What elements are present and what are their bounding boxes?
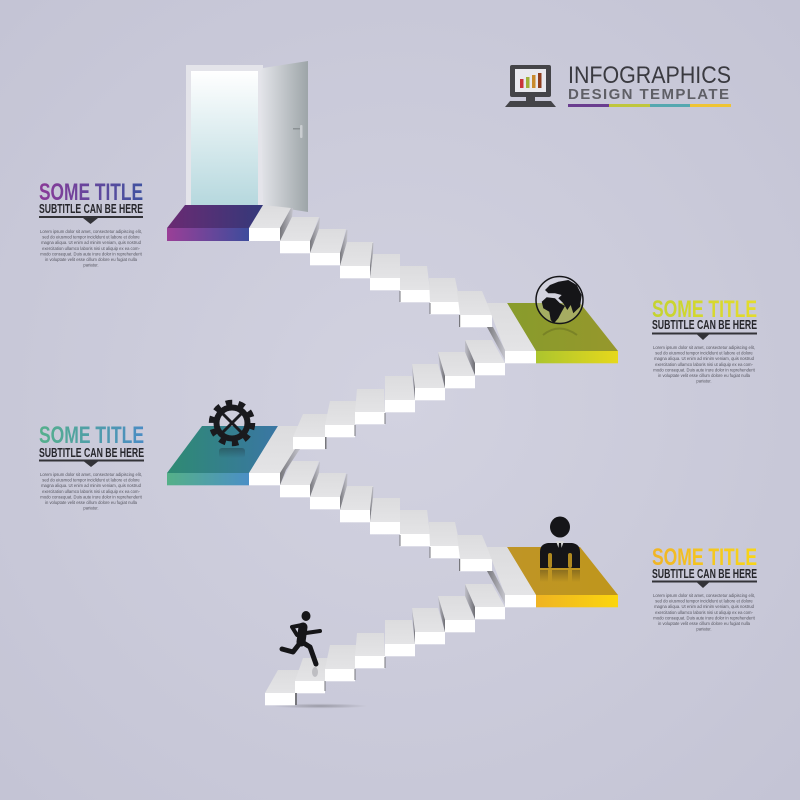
icon: businessman — [540, 516, 580, 582]
logo title: INFOGRAPHICS — [568, 62, 731, 89]
logo subtitle: DESIGN TEMPLATE — [568, 86, 729, 103]
text block: purple step: exercitation ullamco laboris nisi ut aliquip ex ea com- — [42, 246, 140, 251]
text block: teal step: magna aliqua. Ut enim ad minim veniam, quis nostrud — [41, 483, 142, 488]
stairs: second flight rising right — [249, 340, 505, 485]
open door — [186, 61, 308, 212]
text block: teal step: Lorem ipsum dolor sit amet, consectetur adipiscing elit, — [40, 472, 142, 477]
text block: purple step — [39, 179, 143, 268]
text block: green step: Lorem ipsum dolor sit amet, consectetur adipiscing elit, — [653, 345, 755, 350]
text block: yellow step: Lorem ipsum dolor sit amet, consectetur adipiscing elit, — [653, 593, 755, 598]
text block: purple step: magna aliqua. Ut enim ad minim veniam, quis nostrud — [41, 240, 142, 245]
text block: green step: in voluptate velit esse cillum dolore eu fugiat nulla — [658, 373, 751, 378]
platform: yellow — [507, 547, 618, 607]
text block: purple step: pariatur. — [83, 263, 99, 268]
stairs: third flight descending right — [280, 461, 536, 607]
platform: green — [507, 303, 618, 363]
text block: green step: SOME TITLE — [652, 296, 757, 323]
text block: teal step: SUBTITLE CAN BE HERE — [39, 446, 144, 460]
text block: purple step: SOME TITLE — [39, 179, 143, 206]
text block: yellow step: pariatur. — [696, 627, 712, 632]
text block: yellow step: SUBTITLE CAN BE HERE — [652, 567, 757, 581]
header logo — [505, 62, 731, 107]
text block: teal step: modo consequat. Duis aute irure dolor in reprehenderit — [40, 494, 143, 499]
text block: green step: SUBTITLE CAN BE HERE — [652, 318, 757, 332]
text block: green step: pariatur. — [696, 379, 712, 384]
text block: teal step: exercitation ullamco laboris nisi ut aliquip ex ea com- — [42, 489, 140, 494]
icon: runner — [282, 611, 320, 677]
text block: yellow step: SOME TITLE — [652, 544, 757, 571]
text block: green step: sed do eiusmod tempor incididunt ut labore et dolore — [655, 351, 753, 356]
text block: purple step: in voluptate velit esse cillum dolore eu fugiat nulla — [45, 257, 138, 262]
text block: green step: magna aliqua. Ut enim ad minim veniam, quis nostrud — [654, 356, 755, 361]
stairs: bottom flight rising right — [265, 584, 505, 708]
icon: gear — [212, 402, 252, 458]
icon: monitor chart — [505, 65, 556, 107]
text block: purple step: modo consequat. Duis aute irure dolor in reprehenderit — [40, 251, 143, 256]
text block: purple step: sed do eiusmod tempor incididunt ut labore et dolore — [42, 235, 140, 240]
colour bar — [568, 104, 731, 107]
text block: purple step: Lorem ipsum dolor sit amet, consectetur adipiscing elit, — [40, 229, 142, 234]
text block: yellow step: magna aliqua. Ut enim ad minim veniam, quis nostrud — [654, 604, 755, 609]
text block: teal step: pariatur. — [83, 506, 99, 511]
text block: green step — [652, 296, 757, 384]
icon: globe — [536, 276, 583, 335]
text block: teal step: in voluptate velit esse cillum dolore eu fugiat nulla — [45, 500, 138, 505]
text block: green step: modo consequat. Duis aute irure dolor in reprehenderit — [653, 367, 756, 372]
platform: purple — [167, 205, 263, 241]
text block: green step: exercitation ullamco laboris nisi ut aliquip ex ea com- — [655, 362, 753, 367]
text block: yellow step: exercitation ullamco laboris nisi ut aliquip ex ea com- — [655, 610, 753, 615]
text block: teal step: SOME TITLE — [39, 422, 144, 449]
text block: yellow step: sed do eiusmod tempor incididunt ut labore et dolore — [655, 599, 753, 604]
text block: yellow step — [652, 544, 757, 632]
text block: yellow step: modo consequat. Duis aute irure dolor in reprehenderit — [653, 615, 756, 620]
text block: purple step: SUBTITLE CAN BE HERE — [39, 202, 143, 216]
text block: yellow step: in voluptate velit esse cillum dolore eu fugiat nulla — [658, 621, 751, 626]
text block: teal step — [39, 422, 144, 511]
stairs: top flight descending right — [249, 205, 536, 363]
text block: teal step: sed do eiusmod tempor incididunt ut labore et dolore — [42, 478, 140, 483]
platform: teal — [167, 426, 278, 485]
